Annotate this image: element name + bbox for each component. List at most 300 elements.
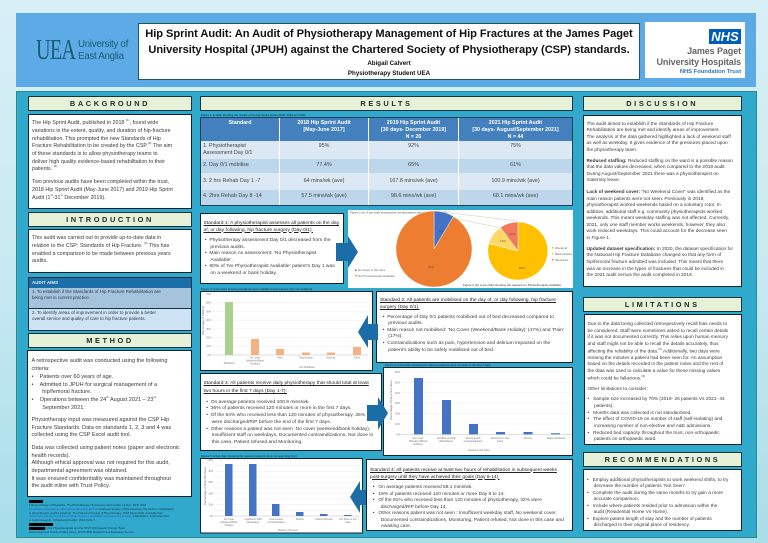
bar chart: standard 3: 40% <box>395 392 401 395</box>
text: discussion: that the data values decreased, when compared to the 2019 audit. <box>586 165 726 170</box>
bar chart: standard 2: Hypotension <box>299 356 314 360</box>
audit aims header <box>29 278 191 288</box>
audit aims header: AUDIT AIMS <box>32 280 58 284</box>
references: References <box>29 500 43 503</box>
column header: 2021: [30 days- August/September 2021] <box>472 127 559 133</box>
text: discussion: work reduced weekdays. This could account for the decrease seen <box>586 229 727 234</box>
text: method: collected using the CSP Excel audit tool. <box>32 432 131 438</box>
row values <box>301 193 538 199</box>
authors <box>348 60 430 76</box>
references: https://www.rcplondon.ac.uk/projects/outputs/hip-sprint 2 Chartered Society of Physiotherapy. Hip fracture rehabilitation <box>29 508 174 511</box>
arrow: standard 4 to chart <box>350 481 366 513</box>
header banner <box>16 13 756 87</box>
text: recommendations: accurate comparison. <box>594 497 639 502</box>
text: background: Fracture Rehabilitation to be created by the CSP.(2) The aim <box>32 141 172 149</box>
legend b: Weekdays <box>555 258 569 262</box>
text: limitations: • The effect of COVID-19 on number of staff (self-isolating) and <box>588 417 722 422</box>
text: standard 1: Standard 1: A physiotherapist assesses all patients on the day <box>204 221 339 226</box>
text: discussion: as well as weekday. It gives evidence of the pressures placed upon <box>586 141 728 146</box>
text: standard 4: • On average patients received 68.1 mins/wk. <box>373 485 473 490</box>
bar chart: standard 2: 20% <box>206 336 212 340</box>
pie chart a <box>396 211 472 287</box>
bar chart: standard 2: Other <box>354 356 360 360</box>
row values <box>304 178 540 184</box>
column header: 2018: 2018 Hip Sprint Audit <box>297 120 351 126</box>
bar chart: standard 4: Percentage of Days Not Seen <box>203 466 207 505</box>
row values: 92% <box>408 143 419 149</box>
row values: 75% <box>510 143 521 149</box>
bar chart: standard 2: (Weekend/Bank <box>246 360 265 362</box>
bar chart: standard 4: Holiday) <box>225 524 234 527</box>
row values: 68.1 mins/wk (ave) <box>493 193 538 199</box>
aim 2 <box>29 308 191 330</box>
text: recommendations: decrease the number of patients ‘Not Seen’. <box>594 484 686 489</box>
text: recommendations: • Complete the audit during the same months to try gain a more <box>587 491 723 496</box>
text: limitations <box>584 314 742 445</box>
bar chart: standard 4: (Weekdays) <box>247 521 260 524</box>
bar chart: standard 2: No Cover <box>250 356 260 360</box>
text: standard 4: • Of the 81% who received less than 120 minutes of physiotherapy, 32% were <box>373 498 542 503</box>
text: limitations: patients). <box>594 404 614 409</box>
arrows between findings and charts <box>336 236 388 513</box>
references: Acknowledgements <box>29 523 53 526</box>
authors: Abigail Calvert <box>367 60 411 67</box>
text: standard 1: • Physiotherapy assessment Day 0/1 decreased from the <box>205 238 331 243</box>
bar chart: standard 3: Patient Refused <box>547 436 566 440</box>
text: method: • Patients over 60 years of age. <box>32 374 113 380</box>
text: discussion: maternity leave. <box>586 178 620 183</box>
bar chart: standard 3: 50% <box>395 381 401 384</box>
column header: 2019: 2019 Hip Sprint Audit <box>387 120 440 126</box>
text: limitations: • Reduced bed capacity throughout the trust, non-orthopaedic <box>588 431 720 436</box>
row values: 61% <box>510 162 521 168</box>
text: introduction: relation to the CSP: Standards of Hip Fracture. (2) This has <box>32 241 169 249</box>
text: discussion: Reduced staffing: Reduced staffing on the ward is a possible reason <box>586 159 733 164</box>
heading: background: BACKGROUND <box>70 99 150 108</box>
text: standard 2: • Contraindications such as pain, hypertension and delirium impacted on the <box>383 341 550 346</box>
bar chart: standard 4: 30% <box>208 471 213 473</box>
heading: discussion <box>583 96 742 111</box>
text: discussion: in Figure 1. <box>586 236 610 241</box>
bar chart: standard 4: Patient Refused <box>315 518 333 521</box>
heading: introduction: INTRODUCTION <box>66 215 154 224</box>
text: limitations: if it was not documented correctly. This relies upon human memory <box>588 335 728 340</box>
references: 1 Royal College of Physicians. The Physiotherapy Hip Fracture Sprint Audit. London: RCP; 2018. <box>29 504 147 507</box>
bar chart: standard 3: (Weekdays) <box>439 439 453 443</box>
bar chart: standard 3: Monitor <box>524 436 532 440</box>
text: standard 3: two hours in the first 7 days (Day 1-7). <box>204 389 287 394</box>
text: method: A retrospective audit was conducted using the following <box>32 358 167 364</box>
text: recommendations: discharged to their original place of residency. <box>594 523 690 528</box>
references <box>29 500 174 534</box>
heading: background <box>28 96 192 111</box>
bar chart: standard 4: 10% <box>208 505 213 507</box>
text: method: hip/femoral fracture. <box>42 389 92 395</box>
bar chart: standard 3: No Cover <box>413 436 424 440</box>
references: https://www.csp.org.uk/publications/hip-fracture-rehabilitation-physiotherapy-practice 3 Althubaiti A. Information bias <box>29 515 169 518</box>
column header: 2021 <box>472 120 559 140</box>
text: discussion: The audit aimed to establish if the Standards of Hip Fracture <box>586 122 713 126</box>
references: Dickon Reid and Charlie Phillips-Lacey, JPUH NIHR Research and Evaluation Service. <box>29 531 135 534</box>
text: standard 1: • 90% of ‘No Physiotherapist Available’ patient’s Day 1 was <box>205 264 335 269</box>
text: standard 3: • Of the 64% who received less than 120 minutes of physiotherapy, 36% <box>206 413 365 418</box>
text: method: Physiotherapy input was measured against the CSP Hip <box>32 417 169 423</box>
bar chart: standard 2: Pain <box>277 356 283 360</box>
text: background: Audit (1st-31st December 2019). <box>32 193 106 201</box>
legend b: Weekend <box>555 246 568 250</box>
text: discussion <box>583 115 742 287</box>
text: standard 1: on a weekend or bank holiday. <box>210 270 277 276</box>
row: rehab day 8-14 <box>201 190 572 204</box>
bar chart: standard 3: Not Done in this <box>491 436 510 440</box>
text: standard 2: patient’s ability to be safely mobilised out of bed. <box>388 348 494 353</box>
text: method: departmental agreement was obtained. <box>32 468 128 474</box>
text: discussion: main reason patients were not seen. Previously in 2019, <box>586 197 705 202</box>
column header: 2019: [30 days- December 2019] <box>381 127 446 133</box>
text: standard 3 <box>200 373 382 451</box>
text: standard 1: • Main reason no assessment: ‘No Physiotherapist <box>205 251 316 256</box>
row label: 3. 2 hrs Rehab Day 1 -7 <box>203 178 260 184</box>
bar chart: standard 2 <box>200 291 373 371</box>
text: discussion: addition, additional staff e.g. community physiotherapists worked <box>586 210 722 215</box>
bar chart: standard 4: Contraindication <box>267 521 285 524</box>
text: standard 4: Standard 4: All patients receive at least two hours of rehabilitation in subsequent weeks <box>370 468 557 472</box>
column header: 2019 <box>381 120 446 140</box>
bar chart: standard 3: Percentage of Days Not Seen <box>389 380 393 420</box>
aim 1: 1. To establish if the Standards of Hip Fracture Rehabilitation are <box>32 289 161 294</box>
pie chart panel <box>348 210 573 288</box>
text: discussion: Lack of weekend cover: “No Weekend Cover” was identified as the <box>586 190 730 195</box>
text: discussion: Updated dataset specification: In 2020, the dataset specification for <box>586 247 733 252</box>
text: method: • Operations between the 24th August 2021 – 23rd <box>32 395 156 403</box>
logo: University of East Anglia: UEA <box>36 35 75 66</box>
bar chart: standard 4: 40% <box>208 460 213 462</box>
legend b <box>552 246 573 262</box>
text: standard 2: previous audits. <box>388 321 423 326</box>
heading: recommendations: RECOMMENDATIONS <box>605 455 720 464</box>
bar chart: standard 4: Reasons Not Seen <box>278 529 299 532</box>
panel: audit aims <box>28 276 192 330</box>
text: limitations: increasing number of non-elective and A&E admissions. <box>594 424 712 429</box>
text: standard 3: Insufficient staff on weekdays, Documented contraindications, Not done in <box>212 433 373 438</box>
column header: standard: Standard <box>229 120 251 126</box>
bar chart: standard 4: 0% <box>210 516 213 518</box>
text: standard 1 <box>200 213 344 284</box>
bar chart: standard 4: Not Done in this <box>339 518 357 521</box>
text: background: variations in the extent, quality, and duration of hip-fracture <box>32 128 171 134</box>
text: introduction <box>28 229 192 273</box>
references: in health research. J Multidiscip Healthc. 2016;9:211-7. <box>29 519 96 522</box>
pie chart a: 91% <box>428 265 434 269</box>
aim 2: 2. To identify areas of improvement in order to provide a better <box>32 310 156 315</box>
bar chart: standard 4: Insufficient Staff <box>245 518 262 521</box>
bar chart: standard 4 <box>200 458 363 534</box>
text: standard 1: Available’. <box>210 258 233 262</box>
heading: results <box>200 96 573 111</box>
text: standard 2: surgery (Day 0/1). <box>380 305 420 310</box>
caption: chart standard 2: Figure 3: A bar chart showing if patients were mobilised and reasons why not mobilised <box>201 286 312 290</box>
text: limitations: affecting the reliability of the data.(3) Additionally, two days were <box>588 346 720 354</box>
poster heading: University Hospital (JPUH) against the Chartered Society of Physiotherapy (CSP) standards. <box>148 44 630 56</box>
poster heading: Hip Sprint Audit: An Audit of Physiotherapy Management of Hip Fractures at the James Paget <box>145 28 633 40</box>
row values: 167.8 mins/wk (ave) <box>389 178 438 184</box>
bar chart: standard 2: Delirium <box>326 356 336 360</box>
text: standard 4: Awaiting care. <box>381 524 411 529</box>
text: limitations: based on the details recorded in the patient notes and the rest of <box>588 362 723 367</box>
row: physiotherapist assessment <box>201 140 572 158</box>
text: method: • Admitted to JPUH for surgical management of a <box>32 382 157 388</box>
bar chart: standard 3: 10% <box>395 423 401 426</box>
column header: 2021: N = 44 <box>508 134 523 140</box>
row values: 57.5 mins/wk (ave) <box>301 193 347 199</box>
text: standard 3: • 36% of patients received 120 minutes or more in the first 7 days. <box>206 406 352 411</box>
poster title and authors <box>138 22 640 80</box>
text: introduction: audits. <box>32 258 48 264</box>
row values <box>316 162 521 168</box>
column header: 2019: N = 26 <box>406 134 421 140</box>
pie chart b: 10% <box>509 232 515 236</box>
text: standard 3: this case, Patient refused and Monitoring. <box>212 440 303 445</box>
text: standard 4 <box>366 459 573 531</box>
text: standard 2: • Percentage of Day 0/1 patients mobilised out of bed decreased compared to <box>383 315 554 320</box>
text: method: criteria: <box>32 366 50 372</box>
column header: 2018: [May-June 2017] <box>303 127 345 133</box>
row values: 64 mins/wk (ave) <box>304 178 344 184</box>
text: standard 3: Standard 3: All patients receive daily physiotherapy that should total at least <box>204 381 369 386</box>
bar chart: standard 4: 25% <box>208 482 213 484</box>
text: recommendations: • Explore patient length of stay and the number of patients <box>587 517 712 522</box>
bar chart: standard 3: Insufficient Staff <box>437 436 455 440</box>
text: limitations: and staff might not be able to recall the details accurately, thus <box>588 342 719 347</box>
text: recommendations: • Include where patients resided prior to admission within the <box>587 504 717 509</box>
text: background: The Hip Sprint Audit, published in 2018 (1), found wide <box>32 118 158 126</box>
row label <box>203 143 252 156</box>
row label: Assessment Day 0/1 <box>203 150 252 156</box>
bar chart: standard 4: 15% <box>208 493 213 495</box>
text: standard 4: • Other reasons patient was not seen : Insufficient weekday staff, No weekend cover, <box>373 511 557 516</box>
legend a: Not Seen in this case <box>358 268 386 272</box>
bar chart: standard 3: (Weekend/Bank <box>409 439 428 443</box>
bar chart: standard 2: 0% <box>208 354 212 357</box>
heading: limitations: LIMITATIONS <box>625 300 700 309</box>
row values: 98.6 mins/wk (ave) <box>391 193 436 199</box>
logo: University of East Anglia: East Anglia <box>78 50 124 62</box>
row label: 4. 2hrs Rehab Day 8 -14 <box>203 193 262 199</box>
text: limitations: Other limitations to consider: <box>588 387 648 392</box>
text: limitations: Due to the data being collected retrospectively recall bias needs to <box>588 322 727 327</box>
text: background: rehabilitation. This prompted the new Standards of Hip <box>32 136 161 142</box>
text: background: 2018 Hip Sprint Audit (May-June 2017) and 2019 Hip Sprint <box>32 187 173 193</box>
pie chart b <box>488 222 548 280</box>
text: background: deliver high quality evidence-based rehabilitation to their <box>32 159 165 165</box>
text: discussion: Rehabilitation are being met and identify areas of improvement. <box>586 128 720 133</box>
bar chart: standard 3: Reasons Not Seen <box>468 448 490 452</box>
text: method: Although ethical approval was not required for this audit, <box>32 460 170 466</box>
bar chart: standard 4: No Cover <box>224 518 234 521</box>
caption: chart standard 3: Figure 4: A bar chart showing the reasons patients were not seen in the first 7 days <box>385 363 491 367</box>
bar chart: standard 2: Holiday) <box>250 362 260 366</box>
row values: 100.9 mins/wk (ave) <box>491 178 540 184</box>
row label: 2. Day 0/1 mobilise <box>203 162 249 168</box>
text: standard 3: • On average patients received 100.9 mins/wk. <box>206 400 310 404</box>
arrow: standard 1 to pie chart <box>336 236 358 268</box>
text: limitations: missing the minutes a patient had been seen for. An assumption <box>588 356 722 361</box>
column header: 2018 <box>297 120 351 133</box>
bar chart: standard 3: 20% <box>395 413 401 416</box>
text: discussion: During August/September 2021 there was a physiotherapist on <box>586 172 719 177</box>
text: discussion: the 2021 audit versus the audit completed in 2019. <box>586 273 693 278</box>
text: background <box>28 114 192 209</box>
text: background: Two previous audits have been completed within the trust, <box>32 179 169 185</box>
logo: University of East Anglia <box>36 35 128 66</box>
text: recommendations: • Employ additional physiotherapists to work weekend shifts, to try <box>587 478 728 482</box>
text: standard 4: discharged/RIP before Day 14. <box>381 504 447 510</box>
heading: recommendations <box>583 452 742 467</box>
caption: table: Figure 1: A table showing the results of the Hip Sprint Audits 2018, 2019 and 2021 <box>201 112 306 116</box>
bar chart: standard 4: Documented <box>269 518 283 521</box>
bar chart: standard 3: Case <box>497 439 504 443</box>
bar chart: standard 2: 50% <box>206 310 212 313</box>
bar chart: standard 3: Documented <box>466 436 481 440</box>
text: discussion: hip/femoral fracture admitted was included. This meant that there <box>586 260 723 265</box>
text: discussion: weekends. This meant weekday staffing was not affected. Currently, <box>586 216 729 221</box>
table header row <box>201 118 572 140</box>
text: method: Data was collected using patient notes (paper and electronic <box>32 445 180 451</box>
aim 1: being met in current practice. <box>32 294 90 300</box>
text: method: the audit inline with Trust Policy. <box>32 483 110 489</box>
bar chart: standard 3: 0% <box>396 433 401 436</box>
text: standard 3: were discharged/RIP before the end of the first 7 days. <box>212 420 331 425</box>
text: standard 1: previous audits. <box>210 244 245 250</box>
text: discussion: 2021, only one staff member works weekends, however, they also <box>586 223 725 228</box>
text: introduction: This audit was carried out to provide up-to-date data in <box>32 235 161 241</box>
results table <box>200 117 573 206</box>
bar chart: standard 2: 10% <box>206 345 212 348</box>
text: method <box>27 350 192 497</box>
legend b: Bank Holiday <box>555 252 573 256</box>
text: method: It was ensured confidentiality was maintained throughout <box>32 476 171 482</box>
text: limitations: which could be fallacious.(3) <box>588 374 645 381</box>
text: method: September 2021. <box>42 405 85 411</box>
aim 1 <box>29 288 191 308</box>
logo: NHS James Paget <box>645 22 745 78</box>
text: discussion: the physiotherapy team. <box>586 148 637 153</box>
text: standard 2: • Main reason not mobilised: ‘No Cover (Weekend/Bank Holiday)’ (47%) and ‘Pain’ <box>383 328 564 333</box>
text: background: of these standards is to allow physiotherapy teams to <box>32 151 158 157</box>
row values: 77.4% <box>316 162 332 168</box>
text: discussion: The analysis of the data gathered highlighted a lack of weekend staff <box>586 135 731 140</box>
references: Many thanks to the Physiotherapists and the JPUH Orthopaedic Therapy Team, <box>29 527 126 530</box>
heading: limitations <box>583 297 742 312</box>
bar chart: standard 2: 30% <box>206 328 212 331</box>
caption: pie chart a: Figure 2 (a): A pie chart showing the overall patients assessed upon Day 0/1 <box>350 210 448 214</box>
connector lines <box>434 211 518 228</box>
text: recommendations: audit (Residential Home Vs Home). <box>594 510 668 515</box>
arrow: standard 3 to chart <box>367 397 388 430</box>
bar chart: standard 4: Case <box>345 521 351 524</box>
trust name: University Hospitals <box>656 57 741 67</box>
arrow: standard 2 to chart <box>358 315 378 348</box>
bar chart: standard 2: Mobilised <box>224 362 235 365</box>
caption: pie chart b: Figure 2 (b): A pie chart showing the reasons for Physiotherapist Available <box>463 283 561 287</box>
text: standard 2: Standard 2: All patients are mobilised on the day of, or day following, hip fracture <box>380 298 556 303</box>
aim 2: overall service and quality of care to hip fracture patients. <box>32 316 146 320</box>
pie chart a: 9% <box>439 229 444 233</box>
text: recommendations <box>583 469 742 531</box>
row values <box>318 143 521 149</box>
bar chart: standard 2: 70% <box>206 293 212 296</box>
text: standard 1: of, or day following, hip fracture surgery (Day 0/1). <box>204 228 313 232</box>
text: method: health records). <box>32 453 70 459</box>
text: discussion: physiotherapist worked weekends based on a voluntary rotor. In <box>586 203 721 208</box>
caption: chart standard 4: Figure 5: A bar chart showing the reasons patients were not seen Day 8-14 <box>201 454 297 458</box>
bar chart: standard 2: 40% <box>206 319 212 322</box>
text: limitations: the data was used to calculate a value for these missing values <box>588 369 720 374</box>
text: method: Fracture Standards. Data on standards 1, 2, 3 and 4 was <box>32 425 171 431</box>
heading: method <box>28 333 192 348</box>
heading: method: METHOD <box>86 336 134 345</box>
text: standard 4: • 19% of patients received 120 minutes or more Day 8 to 14. <box>373 492 505 496</box>
text: standard 3: • Other reasons a patient was not seen: No cover (weekend/bank holiday), <box>206 426 370 432</box>
main poster panel <box>16 91 757 538</box>
text: standard 2 <box>376 291 573 362</box>
legend a: No Physiotherapist Available <box>358 274 395 278</box>
pie chart b: 11% <box>500 239 506 243</box>
row: rehab day 1-7 <box>201 173 572 190</box>
references: in physiotherapy practice (internet). The Chartered Society of Physiotherapy; 2018 [cited 2021]. Available from: <box>29 512 164 515</box>
column header: 2021: 2021 Hip Sprint Audit <box>489 120 542 126</box>
text: standard 4: Documented contraindications, Monitoring, Patient refused, Not done in this case and <box>381 518 564 522</box>
legend a <box>355 268 395 278</box>
text: limitations: be considered. Staff were sometimes asked to recall certain details <box>588 329 728 334</box>
text: introduction: enabled a comparison to be made between previous years <box>32 251 171 257</box>
bar chart: standard 3: Contraindication <box>464 439 483 443</box>
heading: introduction <box>28 212 192 227</box>
bar chart: standard 3: 30% <box>395 402 401 405</box>
heading: results: RESULTS <box>360 99 413 108</box>
text: background: patients. (2) <box>32 164 57 172</box>
trust name: James Paget <box>687 46 741 56</box>
text: limitations: patients on orthopaedic ward. <box>594 437 656 442</box>
text: limitations: • Sample size increased by 70% (2019- 26 patients Vs 2021- 44 <box>588 397 725 402</box>
authors: Physiotherapy Student UEA <box>348 70 430 76</box>
foundation trust: NHS Foundation Trust <box>680 69 741 75</box>
bar chart: standard 3: 60% <box>395 371 401 374</box>
text: limitations: • Months data was collected is not standardised. <box>588 411 692 416</box>
row values: 65% <box>408 162 419 168</box>
bar chart: standard 3 <box>383 367 573 456</box>
row label: 1. Physiotherapist <box>203 143 246 149</box>
pie chart b: 80% <box>519 266 525 270</box>
bar chart: standard 4: Monitor <box>296 518 304 521</box>
text: discussion: was an increase in the types of fractures that could be included in <box>586 267 724 272</box>
text: discussion: the National Hip Fracture Database changed so that any form of <box>586 253 721 258</box>
bar chart: standard 3: Holiday) <box>413 442 423 446</box>
trust name <box>656 46 741 67</box>
text: standard 2: (17%). <box>388 334 403 339</box>
text: standard 4: post-surgery until they have achieved their goals (Day 8-14). <box>370 474 500 480</box>
bar chart: standard 2: 60% <box>206 302 212 305</box>
bar chart: standard 4: (Weekend/Bank <box>221 521 238 524</box>
row: day 0/1 mobilise <box>201 158 572 173</box>
row values: 95% <box>319 143 329 149</box>
heading: discussion: DISCUSSION <box>626 99 698 108</box>
poster heading <box>145 28 633 56</box>
NHS lozenge: NHS <box>711 28 739 44</box>
bar chart: standard 2: Not Mobilised <box>299 366 315 369</box>
logo: University of East Anglia: University of <box>78 39 128 50</box>
bar chart: standard 2: Percentage of Patients <box>201 305 205 335</box>
